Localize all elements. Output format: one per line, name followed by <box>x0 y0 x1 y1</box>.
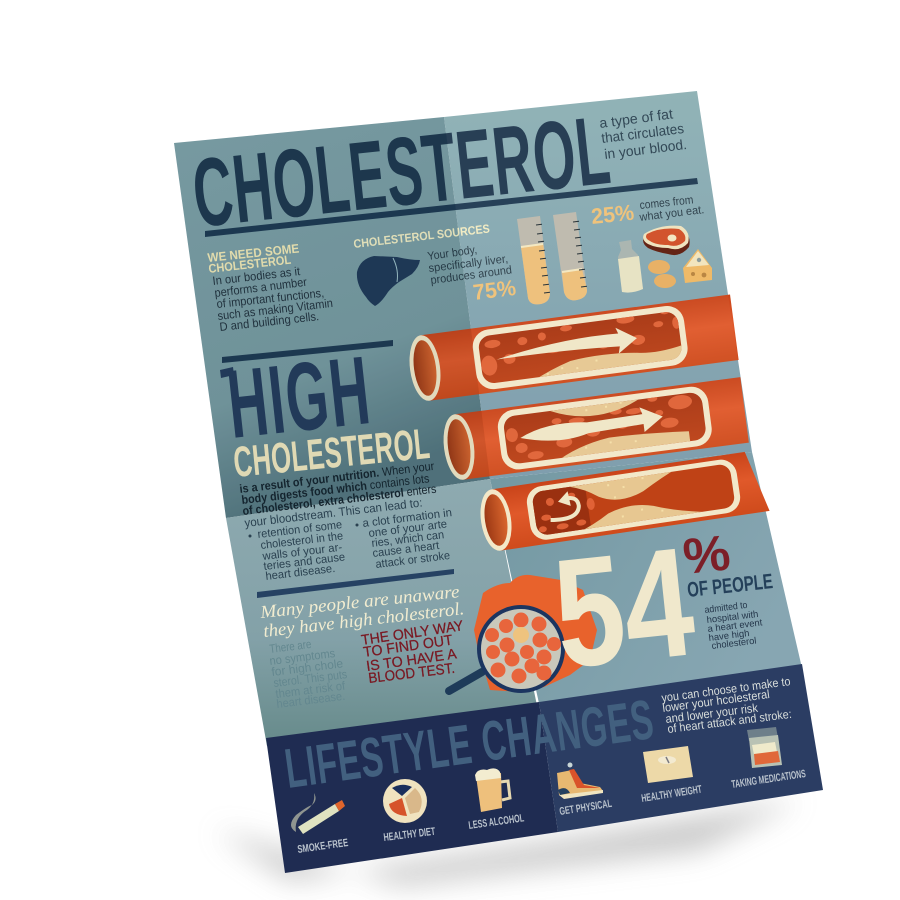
percent sign: % <box>680 524 733 585</box>
icon: liver <box>357 256 420 306</box>
pipe 3 opening <box>477 487 515 553</box>
liver text: Your body, <box>427 244 478 263</box>
handle <box>449 672 482 691</box>
lifestyle icon labels: SMOKE-FREE <box>297 837 349 856</box>
title: CHOLESTEROL <box>188 95 615 248</box>
bullet: clot: attack or stroke <box>375 550 451 571</box>
faint symptoms text: heart disease. <box>276 689 346 711</box>
blood test callout: THE ONLY WAY <box>360 618 465 649</box>
many people unaware quote <box>258 581 465 641</box>
food text: what you eat. <box>638 204 705 224</box>
chart: test tube 25 percent <box>553 212 587 300</box>
pipe 2 arrow <box>518 405 664 448</box>
icon: cheese <box>683 249 712 283</box>
lifestyle intro text: and lower your risk <box>665 701 760 726</box>
magnifying glass <box>449 607 563 691</box>
icon: healthy diet plate <box>383 779 427 823</box>
title rule <box>205 178 698 237</box>
we need cholesterol text: D and building cells. <box>219 309 320 334</box>
blood test callout <box>360 618 465 687</box>
big number 54: 54 <box>546 514 701 701</box>
icon: milk bottle <box>618 240 643 293</box>
faint symptoms text: for high chole <box>271 656 344 679</box>
we need cholesterol text: performs a number <box>214 275 308 300</box>
panel: lower left facet <box>226 479 540 746</box>
icon: bathroom scale <box>643 746 693 783</box>
we need cholesterol text: of important functions, <box>216 286 325 311</box>
bullet: clot: a clot formation in <box>362 507 453 530</box>
chart: test tube 75 percent <box>517 216 550 304</box>
we need some cholesterol heading: WE NEED SOME <box>207 241 300 265</box>
icon: cigarette <box>291 793 345 834</box>
blood test callout: IS TO HAVE A <box>365 646 458 675</box>
of people: OF PEOPLE <box>686 570 774 602</box>
fold shading <box>174 91 752 518</box>
panel: upper left facet <box>174 117 490 518</box>
bullet: clot: ries, which can <box>371 529 445 550</box>
high heading: HIGH <box>223 336 375 459</box>
faint symptoms text: sterol. This puts <box>273 667 348 690</box>
lifestyle intro text: of heart attack and stroke: <box>667 707 792 736</box>
bullet: retention: cholesterol in the <box>260 530 344 552</box>
title definition: a type of fat <box>598 105 674 131</box>
pipe 1 opening <box>406 333 444 403</box>
lifestyle icon labels: GET PHYSICAL <box>559 798 613 818</box>
title definition <box>598 105 688 162</box>
many people unaware quote: Many people are unaware <box>258 581 460 622</box>
heart event text: cholesterol <box>711 636 757 652</box>
bullet: retention: teries and cause <box>263 551 346 573</box>
faint symptoms text: There are <box>269 637 312 656</box>
we need cholesterol text: such as making Vitamin <box>217 296 334 323</box>
pipe 2 opening <box>440 412 478 482</box>
icon: steak <box>643 226 690 255</box>
panel: upper right facet <box>444 91 752 479</box>
lifestyle icon labels: HEALTHY WEIGHT <box>641 784 703 805</box>
we need cholesterol text <box>212 264 334 334</box>
title definition: that circulates <box>600 120 685 146</box>
75 percent: 75% <box>472 275 517 305</box>
title definition: in your blood. <box>603 136 688 162</box>
ground shadow <box>215 800 800 885</box>
25 percent: 25% <box>590 200 635 229</box>
lifestyle intro text <box>661 674 792 736</box>
icon: beer mug <box>475 768 510 812</box>
nutrition text <box>239 459 437 530</box>
pipe 3: severe plaque with clot <box>477 450 770 553</box>
food text <box>638 194 705 224</box>
orange blood blot <box>474 575 597 692</box>
pipe 2 cutaway <box>496 385 714 471</box>
lifestyle icon labels: HEALTHY DIET <box>383 826 436 844</box>
pipe 3 curl arrow <box>548 497 580 521</box>
panel: lower right facet <box>490 452 802 708</box>
heart event text: a heart event <box>707 617 763 635</box>
high rule <box>222 340 393 363</box>
liver text: produces around <box>430 264 513 287</box>
pipe 3 cutaway <box>525 457 742 542</box>
bullet: retention: retention of some <box>257 519 343 541</box>
lifestyle icon labels: TAKING MEDICATIONS <box>731 768 807 791</box>
lifestyle intro text: you can choose to make to <box>661 674 792 705</box>
we need some cholesterol heading: CHOLESTEROL <box>208 253 292 276</box>
section rule <box>257 569 454 598</box>
lifestyle changes heading: LIFESTYLE CHANGES <box>281 687 657 800</box>
pipe 1: early plaque <box>406 295 739 403</box>
food text: comes from <box>639 194 694 212</box>
poster sheet <box>174 91 802 746</box>
we need some cholesterol heading <box>207 241 300 276</box>
nutrition text: is a result of your nutrition. When your <box>239 459 435 496</box>
lifestyle icon labels: LESS ALCOHOL <box>468 812 525 832</box>
icon: medication bottle <box>747 727 782 768</box>
panel: lifestyle changes band <box>266 664 823 873</box>
heart event text: hospital with <box>706 609 759 626</box>
cholesterol sources heading: CHOLESTEROL SOURCES <box>353 222 490 251</box>
nutrition text: body digests food which contains lots <box>241 471 430 507</box>
pipe 2: moderate plaque <box>440 377 749 482</box>
we need cholesterol text: In our bodies as it <box>212 264 301 288</box>
liver text: specifically liver, <box>428 253 509 275</box>
nutrition text: of cholesterol, extra cholesterol enters <box>242 482 437 518</box>
blood test callout: BLOOD TEST. <box>368 661 456 687</box>
pipe 1 cutaway <box>471 304 690 391</box>
bullet: clot: cause a heart <box>372 540 441 560</box>
liver text <box>427 244 513 287</box>
blood cells <box>485 612 561 684</box>
bullet: retention: heart disease. <box>265 563 336 583</box>
faint symptoms text: no symptoms <box>269 646 336 668</box>
lens <box>479 607 563 691</box>
heart event text: admitted to <box>704 600 748 616</box>
lifestyle icon labels <box>297 768 807 856</box>
faint symptoms text <box>269 637 348 711</box>
pipe 3 arrow head <box>557 491 571 508</box>
bullet: retention <box>248 519 346 583</box>
bullet: retention: walls of your ar- <box>261 542 343 563</box>
many people unaware quote: they have high cholesterol. <box>262 598 465 641</box>
bullet: clot: one of your arte <box>368 518 448 540</box>
heart event text <box>704 600 763 652</box>
nutrition text: your bloodstream. This can lead to: <box>244 495 423 530</box>
bullet: clot <box>356 507 453 571</box>
blood test callout: TO FIND OUT <box>362 633 454 661</box>
heart event text: have high <box>708 628 750 644</box>
faint symptoms text: them at risk of <box>275 678 346 701</box>
high cholesterol heading: CHOLESTEROL <box>231 419 432 487</box>
pipe 1 arrow <box>494 325 639 370</box>
lifestyle intro text: lower your hcolesteral <box>662 687 770 715</box>
icon: boot <box>557 762 603 799</box>
icon: potatoes <box>648 260 676 288</box>
